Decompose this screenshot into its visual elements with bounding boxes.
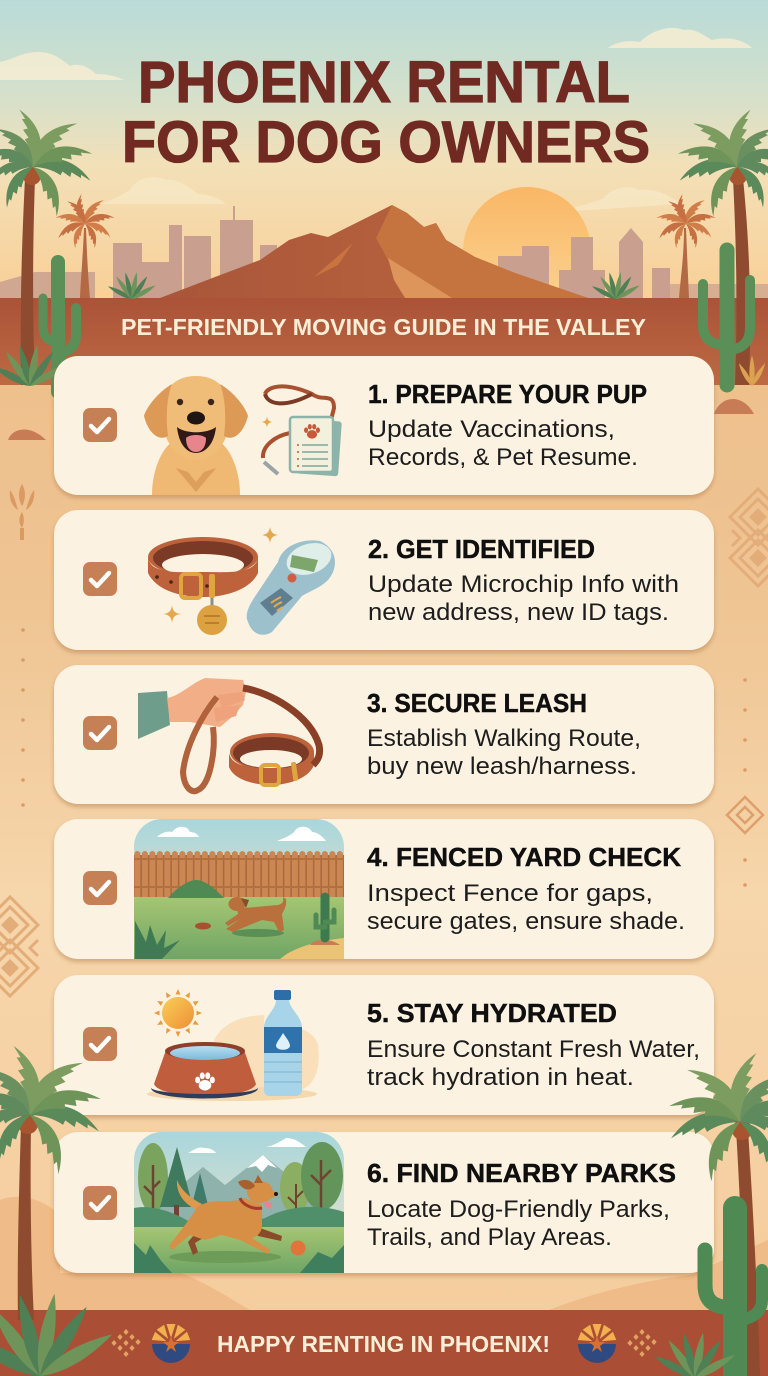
checkbox 2	[83, 562, 117, 596]
icon: hand with leash and collar	[138, 678, 320, 791]
agave yellow right	[737, 355, 767, 387]
foreground agave bottom right	[652, 1332, 737, 1376]
heading 5: 5. STAY HYDRATED	[367, 998, 617, 1028]
checkbox 4	[83, 871, 117, 905]
title	[122, 50, 650, 175]
dog running	[188, 1236, 202, 1255]
step card 5	[54, 975, 714, 1118]
small orange palm right	[656, 194, 716, 298]
step card 1	[54, 356, 714, 498]
description 6: Locate Dog-Friendly Parks,	[367, 1196, 670, 1223]
left diamond pattern	[0, 897, 38, 996]
heading 2: 2. GET IDENTIFIED	[368, 534, 595, 564]
step card 2	[54, 510, 714, 653]
title: PHOENIX RENTAL	[138, 50, 630, 115]
heading 6: 6. FIND NEARBY PARKS	[367, 1158, 676, 1188]
sun	[463, 187, 591, 315]
description 1: Update Vaccinations,	[368, 416, 615, 443]
icon: golden retriever	[144, 376, 248, 495]
icon: leash and pet records	[262, 386, 342, 476]
description 6: Trails, and Play Areas.	[367, 1224, 612, 1251]
right side dots	[743, 678, 747, 887]
icon: water bowl and bottle	[147, 990, 319, 1101]
description 2: new address, new ID tags.	[368, 599, 669, 626]
clouds	[0, 28, 752, 212]
footer emblem left	[111, 1324, 190, 1363]
checkbox 6	[83, 1186, 117, 1220]
description 5: Ensure Constant Fresh Water,	[367, 1036, 700, 1063]
step card 6	[54, 1132, 714, 1276]
foreground saguaro bottom right	[705, 1208, 762, 1376]
tall palm bottom left	[0, 1042, 103, 1320]
step card 4	[54, 819, 714, 962]
description 3: buy new leash/harness.	[367, 753, 637, 780]
checkbox 3	[83, 716, 117, 750]
dog in yard	[225, 897, 286, 932]
checkbox 1	[83, 408, 117, 442]
tall palm top left	[0, 106, 94, 385]
small orange palm left	[55, 194, 115, 298]
agave lower left of band	[0, 344, 68, 389]
saguaro cactus left	[43, 262, 76, 392]
sky background	[0, 0, 768, 300]
left side tribal ornaments	[10, 484, 34, 807]
footer text: HAPPY RENTING IN PHOENIX!	[217, 1331, 550, 1357]
description 4: Inspect Fence for gaps,	[367, 880, 653, 907]
mountain	[160, 205, 588, 298]
scene: park	[134, 1132, 344, 1273]
description 4: secure gates, ensure shade.	[367, 908, 685, 935]
scene: fenced yard	[134, 819, 344, 959]
heading 3: 3. SECURE LEASH	[367, 688, 587, 718]
tall palm bottom right	[667, 1049, 768, 1376]
footer emblem right	[578, 1324, 657, 1363]
agave plants on horizon	[107, 272, 641, 301]
step card 3	[54, 665, 714, 807]
subtitle: PET-FRIENDLY MOVING GUIDE IN THE VALLEY	[121, 314, 646, 340]
heading 1: 1. PREPARE YOUR PUP	[368, 379, 647, 409]
icon: sun	[154, 989, 202, 1037]
tall palm top right	[676, 106, 768, 385]
heading 4: 4. FENCED YARD CHECK	[367, 842, 681, 872]
title: FOR DOG OWNERS	[122, 110, 650, 175]
checkbox 5	[83, 1027, 117, 1061]
rocks	[8, 399, 754, 440]
description 5: track hydration in heat.	[367, 1064, 634, 1091]
desert sand ground	[0, 385, 768, 1310]
description 3: Establish Walking Route,	[367, 725, 641, 752]
right side small diamond	[727, 797, 763, 833]
description 1: Records, & Pet Resume.	[368, 444, 638, 471]
description 2: Update Microchip Info with	[368, 571, 679, 598]
right diamond pattern	[730, 489, 768, 586]
city skyline	[0, 206, 768, 298]
terracotta subtitle band	[0, 298, 768, 385]
footer band	[0, 1310, 768, 1376]
icon: collar with tag	[148, 527, 278, 635]
icon: microchip scanner	[247, 538, 336, 635]
desert mounds	[0, 1197, 768, 1310]
foreground agave bottom left	[0, 1292, 116, 1376]
saguaro cactus right	[703, 250, 750, 385]
